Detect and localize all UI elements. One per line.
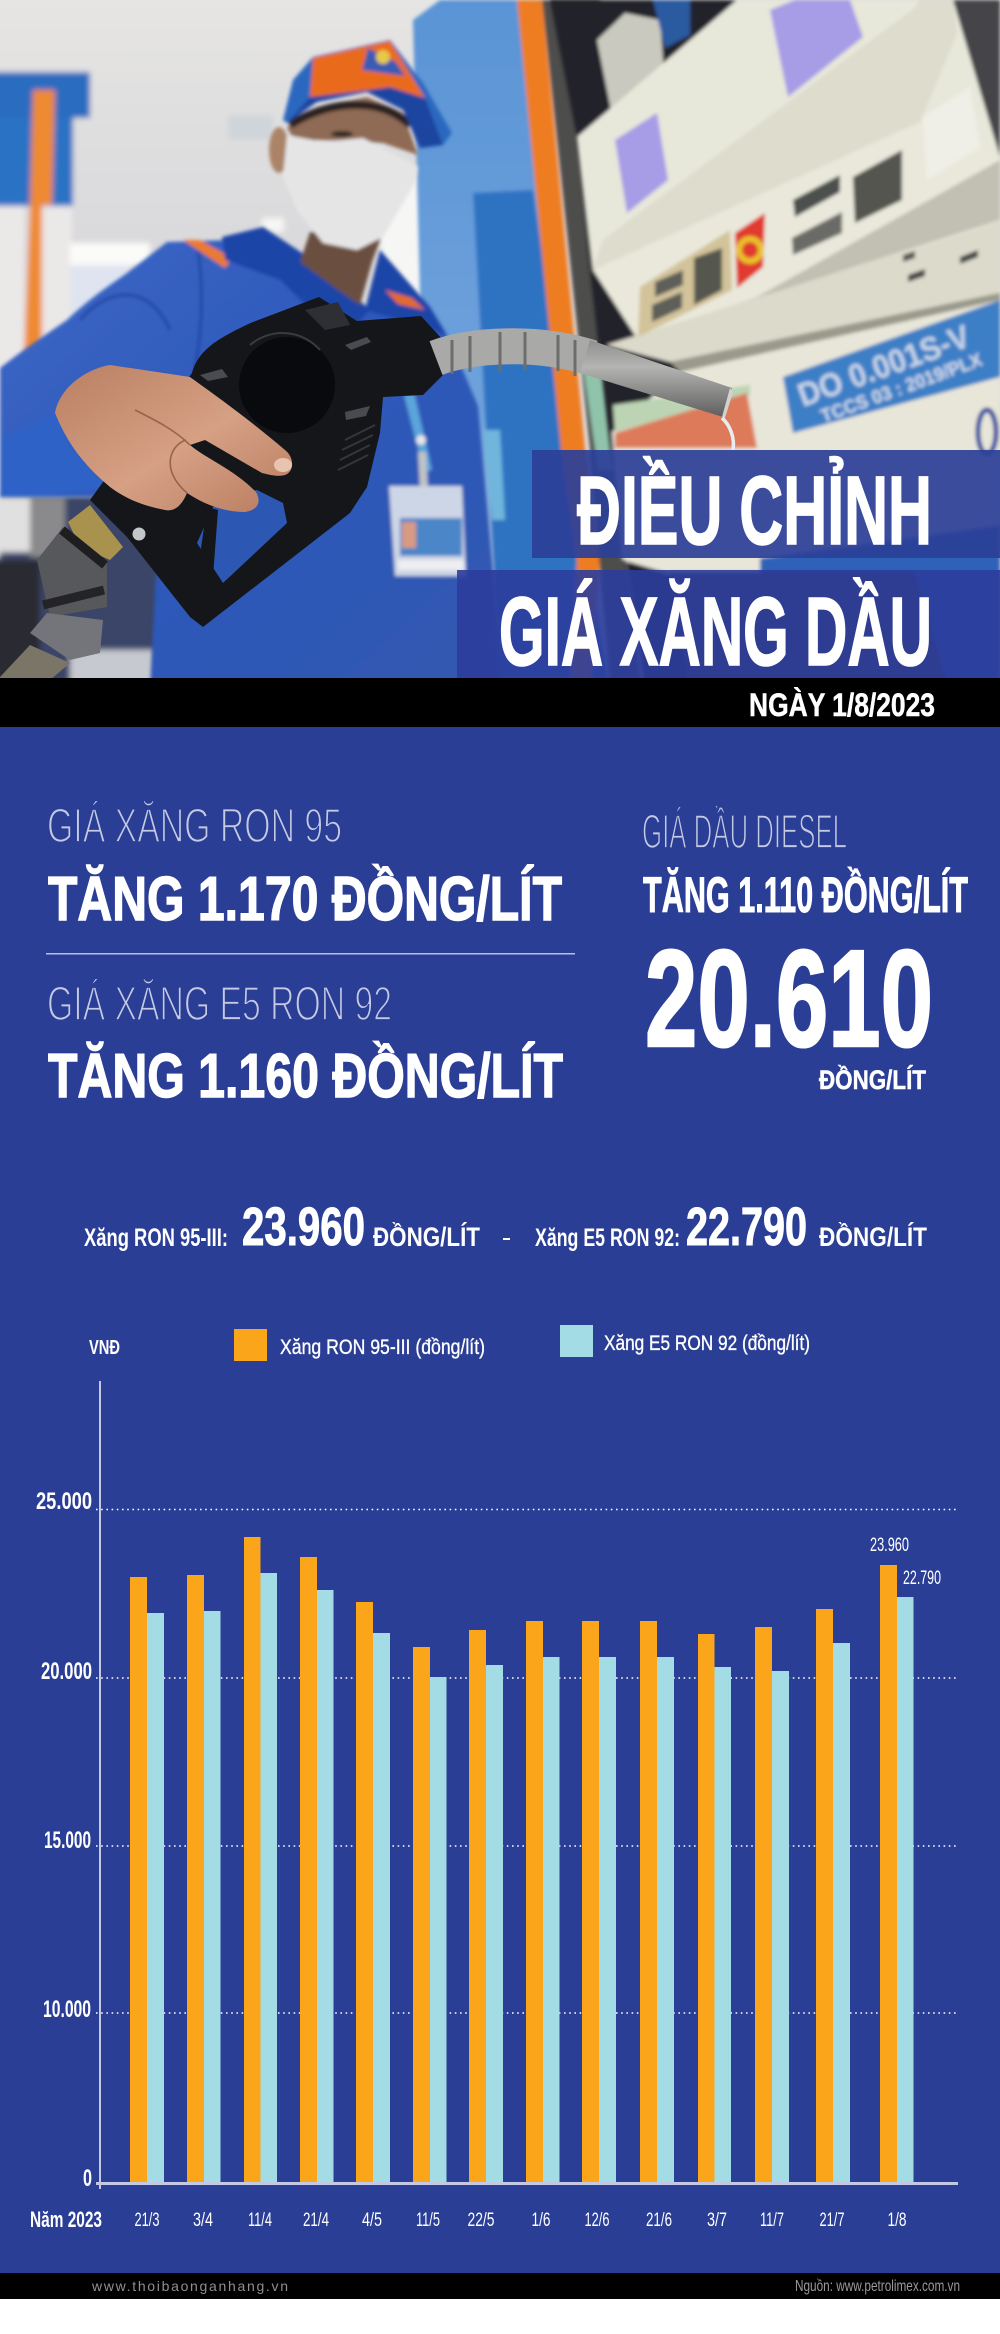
current price row: 23.960: [242, 1197, 365, 1257]
price block: E5 RON 92: TĂNG 1.160 ĐỒNG/LÍT: [48, 1042, 563, 1111]
bars: 3/4: [187, 1575, 220, 2182]
y axis labels: 10.000: [43, 1996, 91, 2023]
bars: 11/5: [413, 1647, 446, 2182]
bars: 12/6: [582, 1621, 616, 2182]
x axis labels: 11/4: [248, 2210, 272, 2231]
bars: 21/3: [130, 1577, 164, 2182]
x axis labels: 21/4: [303, 2210, 329, 2231]
y axis labels: 25.000: [36, 1488, 92, 1515]
title: [499, 456, 932, 686]
x axis labels: 11/7: [760, 2210, 784, 2231]
photo: hand gripping nozzle: [55, 365, 292, 512]
bars: 11/7: [755, 1627, 789, 2182]
photo: fuel nozzle: [0, 297, 443, 680]
price block: RON 95: TĂNG 1.170 ĐỒNG/LÍT: [48, 865, 562, 934]
y axis labels: 0: [83, 2165, 92, 2192]
photo: lanyard and ID badge: [389, 392, 466, 576]
bars: 21/4: [300, 1557, 334, 2182]
bars: 21/7: [816, 1609, 850, 2182]
photo background: station ceiling and left sign: [0, 0, 450, 685]
current price row: 22.790: [686, 1197, 807, 1257]
photo: blue pump pillar: [413, 0, 642, 690]
x axis labels: 21/3: [134, 2210, 160, 2231]
x axis labels: 22/5: [468, 2210, 494, 2231]
x axis labels: 21/7: [820, 2210, 844, 2231]
footer: www.thoibaonganhang.vn: [91, 2278, 288, 2294]
x axis labels: 4/5: [362, 2210, 382, 2231]
footer: [0, 2273, 1000, 2299]
price block: diesel: ĐỒNG/LÍT: [819, 1064, 926, 1095]
bars: 3/7: [698, 1634, 731, 2182]
x axis title: Năm 2023: [30, 2207, 102, 2232]
current price row: ĐỒNG/LÍT: [819, 1221, 927, 1252]
y axis labels: 15.000: [44, 1827, 91, 1854]
bars: 1/8: [880, 1565, 914, 2182]
price block: E5 RON 92: GIÁ XĂNG E5 RON 92: [47, 978, 392, 1031]
price block: RON 95: [47, 800, 562, 934]
legend: E5 RON 92: Xăng E5 RON 92 (đồng/lít): [604, 1332, 810, 1355]
x axis labels: 1/8: [888, 2210, 906, 2231]
legend: RON 95-III: [234, 1329, 485, 1361]
bars: 1/6: [526, 1621, 560, 2182]
legend: E5 RON 92: [560, 1325, 810, 1357]
photo: attendant: [0, 40, 504, 690]
photo: cap: [283, 40, 452, 148]
nozzle trigger opening: [197, 490, 287, 583]
x axis labels: 12/6: [584, 2210, 610, 2231]
price block: diesel: [642, 805, 968, 1095]
photo: metal spout: [436, 332, 733, 450]
bars: 4/5: [356, 1602, 390, 2182]
price block: E5 RON 92: [47, 978, 563, 1111]
photo: fuel attendant holding a nozzle: [0, 0, 1000, 690]
photo: fuel dispenser: [550, 0, 1000, 690]
photo: face, ear and neck: [269, 97, 418, 305]
current price row: ĐỒNG/LÍT: [373, 1221, 480, 1252]
hose coupling and fittings: [0, 505, 123, 680]
value label: E5 RON 92 on 1/8: 22.790: [903, 1568, 941, 1589]
title band 2: [457, 570, 1000, 678]
page background: blue panel: [0, 727, 1000, 2273]
x axis labels: 21/6: [646, 2210, 672, 2231]
y axis labels: 20.000: [41, 1658, 92, 1685]
chart unit label: VNĐ: [89, 1337, 120, 1359]
price block: RON 95: GIÁ XĂNG RON 95: [47, 800, 342, 853]
current price row: [84, 1197, 927, 1257]
title band 1: [532, 450, 1000, 558]
bars: 22/5: [469, 1630, 503, 2182]
x axis labels: 3/7: [707, 2210, 727, 2231]
date band: NGÀY 1/8/2023: [749, 687, 935, 723]
photo: blurred dispenser label text: DO 0.001S-V: [793, 317, 975, 414]
date band: [0, 678, 1000, 727]
current price row: Xăng E5 RON 92:: [535, 1224, 680, 1252]
bars: 11/4: [244, 1537, 277, 2182]
bars: 21/6: [640, 1621, 674, 2182]
x axis labels: 11/5: [416, 2210, 440, 2231]
x axis labels: 1/6: [532, 2210, 550, 2231]
value label: RON 95-III on 1/8: 23.960: [870, 1535, 909, 1556]
photo: blurred dispenser label text: TCCS 03 : 2019/PLX: [818, 350, 985, 428]
current price row: Xăng RON 95-III:: [84, 1224, 228, 1252]
x axis labels: 3/4: [193, 2210, 213, 2231]
x axis labels: [134, 2210, 906, 2231]
bar chart: [30, 1381, 959, 2232]
photo: face mask: [283, 135, 418, 250]
y axis labels: [36, 1488, 92, 2192]
legend: RON 95-III: Xăng RON 95-III (đồng/lít): [280, 1336, 485, 1359]
